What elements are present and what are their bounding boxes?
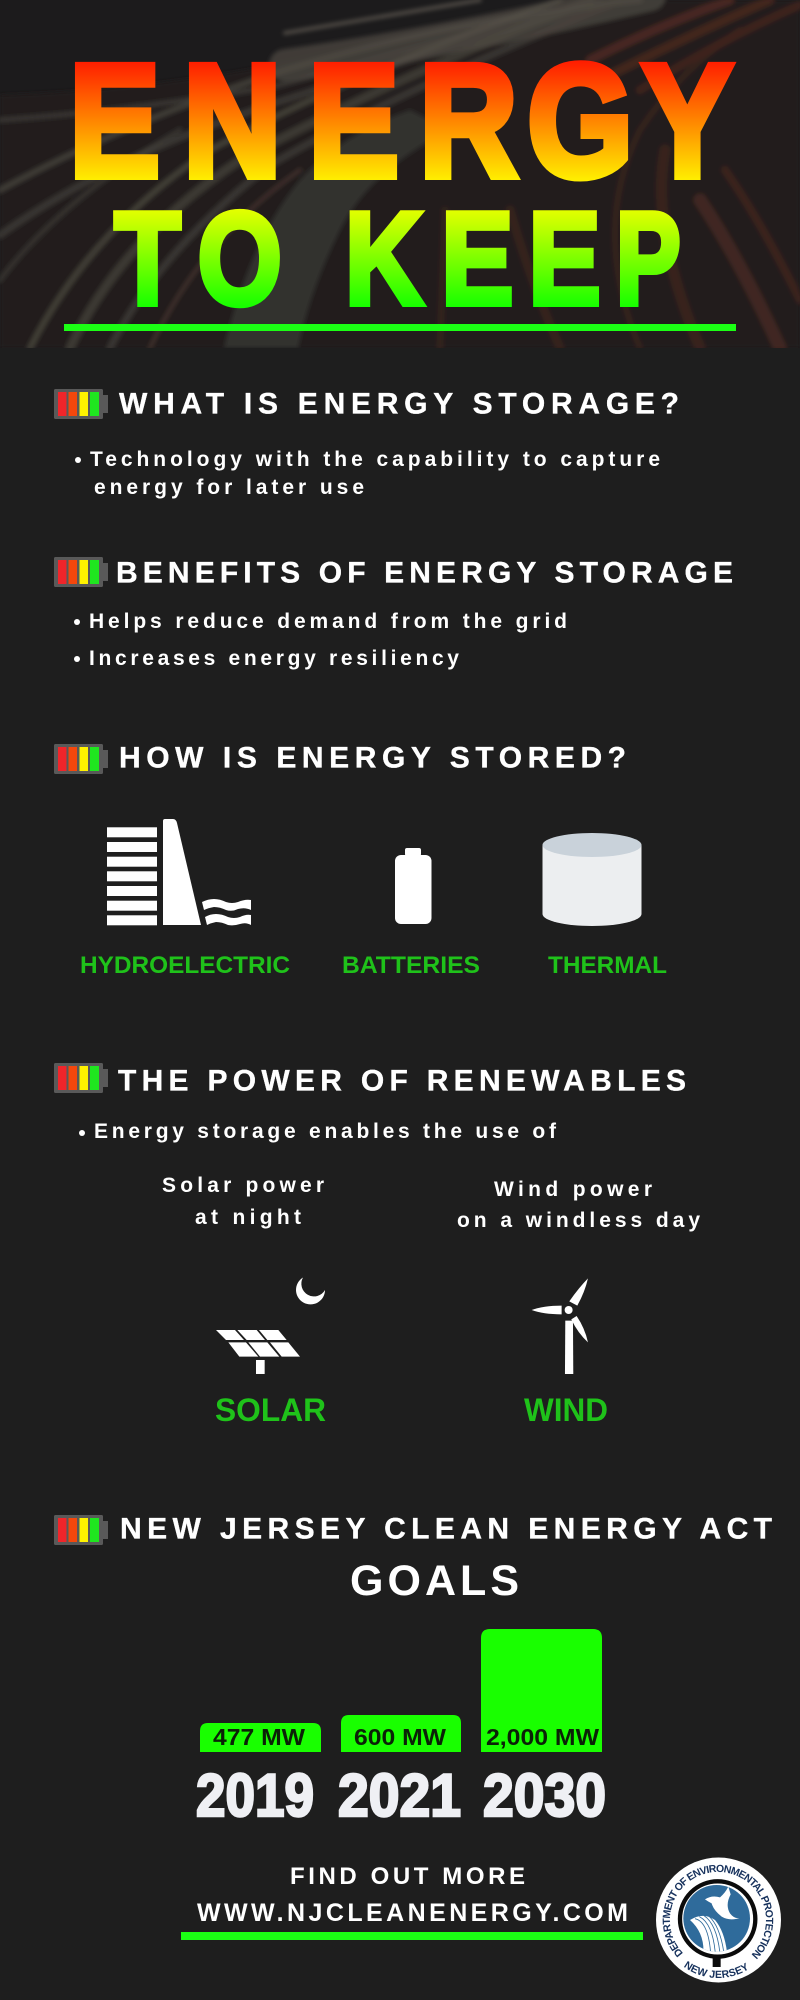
heading: WHAT IS ENERGY STORAGE? (119, 388, 679, 420)
logo: NJ department of environmental protection seal (656, 1858, 781, 1982)
icon: battery (54, 1063, 108, 1093)
icon: battery (54, 1515, 108, 1545)
bar: 2030: 2,000 MW (486, 1724, 599, 1750)
header banner (0, 0, 800, 348)
seal: lower ring text: NEW JERSEY (684, 1961, 747, 1978)
text: solar power at night: at night (195, 1206, 301, 1229)
bar: 2019: 477 MW (213, 1724, 305, 1750)
bullet text: energy for later use (94, 476, 364, 499)
heading: HOW IS ENERGY STORED? (119, 742, 626, 774)
title: ENERGY: ENERGY (69, 33, 733, 210)
bar: 2030 (481, 1629, 602, 1752)
title: TO KEEP: P (616, 185, 681, 332)
text: find out more: FIND OUT MORE (290, 1863, 525, 1890)
bullet text (75, 448, 660, 499)
heading: goals: GOALS (350, 1557, 522, 1605)
section: what is energy storage (54, 388, 679, 499)
text: solar power at night: Solar power (162, 1174, 324, 1197)
icon: wind turbine (532, 1278, 588, 1374)
heading: BENEFITS OF ENERGY STORAGE (116, 556, 733, 590)
title underline (64, 324, 736, 331)
heading: THE POWER OF RENEWABLES (118, 1064, 686, 1098)
year: 2021: 2021 (338, 1762, 461, 1829)
section: the power of renewables (54, 1063, 700, 1428)
bar: 2021: 600 MW (354, 1724, 446, 1750)
text: wind power on a windless day: Wind power (494, 1178, 652, 1201)
bar: 2021 (341, 1715, 461, 1752)
icon: hydroelectric dam (107, 819, 251, 925)
icon: moon (296, 1278, 325, 1304)
label: hydroelectric: HYDROELECTRIC (80, 952, 290, 979)
seal: globe emblem (680, 1881, 755, 1967)
bullet text: Energy storage enables the use of (94, 1120, 557, 1143)
seal: upper ring text: DEPARTMENT OF ENVIRONMENTAL PROTECTION (662, 1864, 774, 1960)
footer underline (181, 1932, 643, 1940)
label: wind: WIND (524, 1392, 608, 1428)
footer call to action (181, 1863, 643, 1940)
text: website: WWW.NJCLEANENERGY.COM (197, 1899, 628, 1927)
heading: NEW JERSEY CLEAN ENERGY ACT (120, 1512, 772, 1546)
label: batteries: BATTERIES (342, 952, 480, 979)
text: wind power on a windless day: on a windless day (457, 1209, 700, 1232)
background photo: highway light trails (0, 0, 800, 348)
icon: battery (54, 744, 108, 774)
text: wind power on a windless day (457, 1178, 700, 1232)
bar chart (200, 1629, 602, 1752)
icon: solar panel (216, 1330, 300, 1374)
icon: battery cell (395, 848, 432, 924)
text: solar power at night (162, 1174, 324, 1229)
year: 2019: 2019 (196, 1762, 314, 1829)
icon: battery (54, 389, 108, 419)
label: thermal: THERMAL (548, 952, 667, 979)
icon: thermal tank (542, 833, 642, 926)
section: new jersey clean energy act goals (54, 1512, 772, 1829)
bar: 2019 (200, 1723, 321, 1752)
bullet text: Technology with the capability to capture (90, 448, 660, 471)
icon: battery (54, 557, 108, 587)
bullet: reduce demand: Helps reduce demand from the grid (89, 610, 567, 633)
bullet: resiliency: Increases energy resiliency (89, 647, 459, 670)
year: 2030: 2030 (483, 1762, 606, 1829)
label: solar: SOLAR (215, 1392, 326, 1428)
title: TO KEEP: TO KEE (114, 185, 601, 332)
section: how is energy stored (54, 742, 667, 979)
section: benefits of energy storage (54, 556, 733, 670)
